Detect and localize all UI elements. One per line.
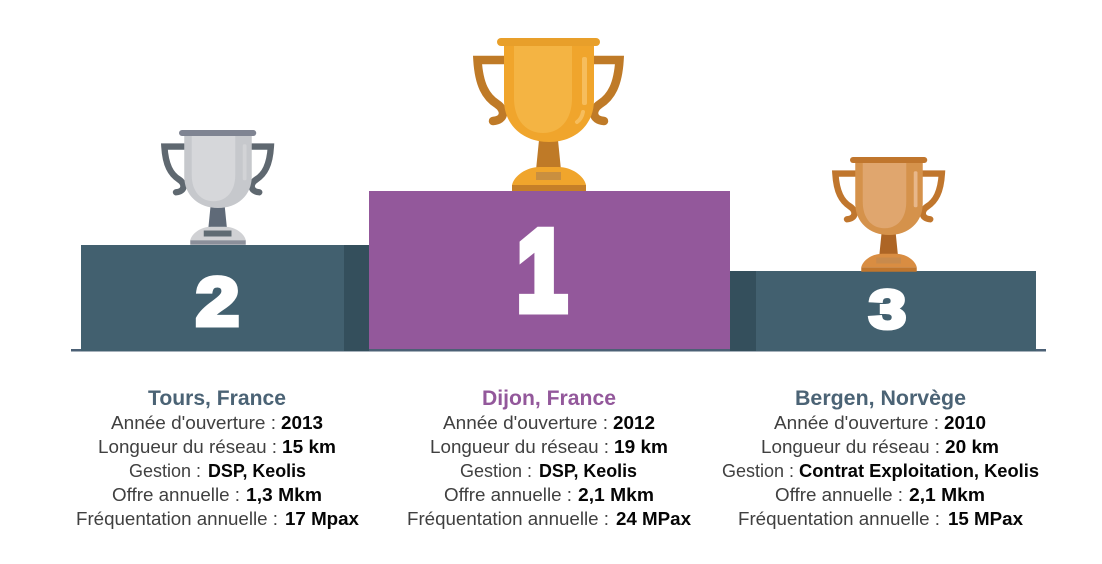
line: annual offer: Offre annuelle : bbox=[444, 484, 572, 505]
line: annual offer bbox=[775, 484, 985, 505]
line: annual ridership: 17 Mpax bbox=[285, 509, 359, 529]
line: opening year: 2012 bbox=[613, 413, 655, 433]
line: management bbox=[129, 460, 306, 481]
line: annual offer bbox=[112, 484, 322, 505]
line: opening year: Année d'ouverture : bbox=[774, 412, 939, 433]
line: opening year: Année d'ouverture : bbox=[111, 412, 276, 433]
podium step 1 bbox=[369, 191, 730, 349]
icon: gold trophy bbox=[478, 38, 620, 191]
line: annual offer: Offre annuelle : bbox=[112, 484, 240, 505]
heading: Bergen, Norvège: Bergen, Norvège bbox=[795, 386, 966, 410]
line: management: Gestion : bbox=[460, 460, 532, 481]
number 1: 1 bbox=[517, 208, 567, 335]
line: annual offer: Offre annuelle : bbox=[775, 484, 903, 505]
line: annual offer: 2,1 Mkm bbox=[909, 485, 985, 505]
number 2: 2 bbox=[196, 264, 239, 340]
line: annual ridership: 15 MPax bbox=[948, 509, 1023, 529]
heading: Tours, France: Tours, France bbox=[148, 386, 286, 410]
line: management: Gestion : bbox=[129, 460, 201, 481]
step 3 shadow side bbox=[730, 271, 756, 351]
baseline bbox=[71, 349, 1046, 352]
text block: Bergen bbox=[722, 386, 1039, 529]
heading: Dijon, France: Dijon, France bbox=[482, 386, 616, 410]
line: network length: Longueur du réseau : bbox=[430, 436, 609, 457]
line: annual offer bbox=[444, 484, 654, 505]
line: network length: Longueur du réseau : bbox=[98, 436, 277, 457]
line: annual offer: 1,3 Mkm bbox=[246, 485, 322, 505]
podium step 3 bbox=[756, 271, 1036, 351]
line: management: DSP, Keolis bbox=[539, 461, 637, 481]
line: network length: 15 km bbox=[282, 437, 336, 457]
line: annual ridership: 24 MPax bbox=[616, 509, 691, 529]
icon: bronze trophy bbox=[835, 157, 942, 272]
line: network length: Longueur du réseau : bbox=[761, 436, 940, 457]
line: network length: 20 km bbox=[945, 437, 999, 457]
podium bbox=[71, 191, 1046, 352]
icon: silver trophy bbox=[164, 130, 271, 245]
line: network length: 19 km bbox=[614, 437, 668, 457]
text block: Dijon bbox=[407, 386, 691, 529]
number 3: 3 bbox=[869, 280, 906, 340]
line: opening year: 2010 bbox=[944, 413, 986, 433]
podium step 2 bbox=[81, 245, 344, 351]
step 2 shadow side bbox=[344, 245, 369, 351]
line: management bbox=[460, 460, 637, 481]
line: annual ridership: Fréquentation annuelle : bbox=[76, 508, 278, 529]
line: management: DSP, Keolis bbox=[208, 461, 306, 481]
text block: Tours bbox=[76, 386, 359, 529]
line: management: Contrat Exploitation, Keolis bbox=[799, 461, 1039, 481]
line: annual ridership: Fréquentation annuelle : bbox=[407, 508, 609, 529]
line: management: Gestion : bbox=[722, 460, 794, 481]
line: opening year: 2013 bbox=[281, 413, 323, 433]
line: annual ridership: Fréquentation annuelle : bbox=[738, 508, 940, 529]
line: opening year: Année d'ouverture : bbox=[443, 412, 608, 433]
line: annual offer: 2,1 Mkm bbox=[578, 485, 654, 505]
